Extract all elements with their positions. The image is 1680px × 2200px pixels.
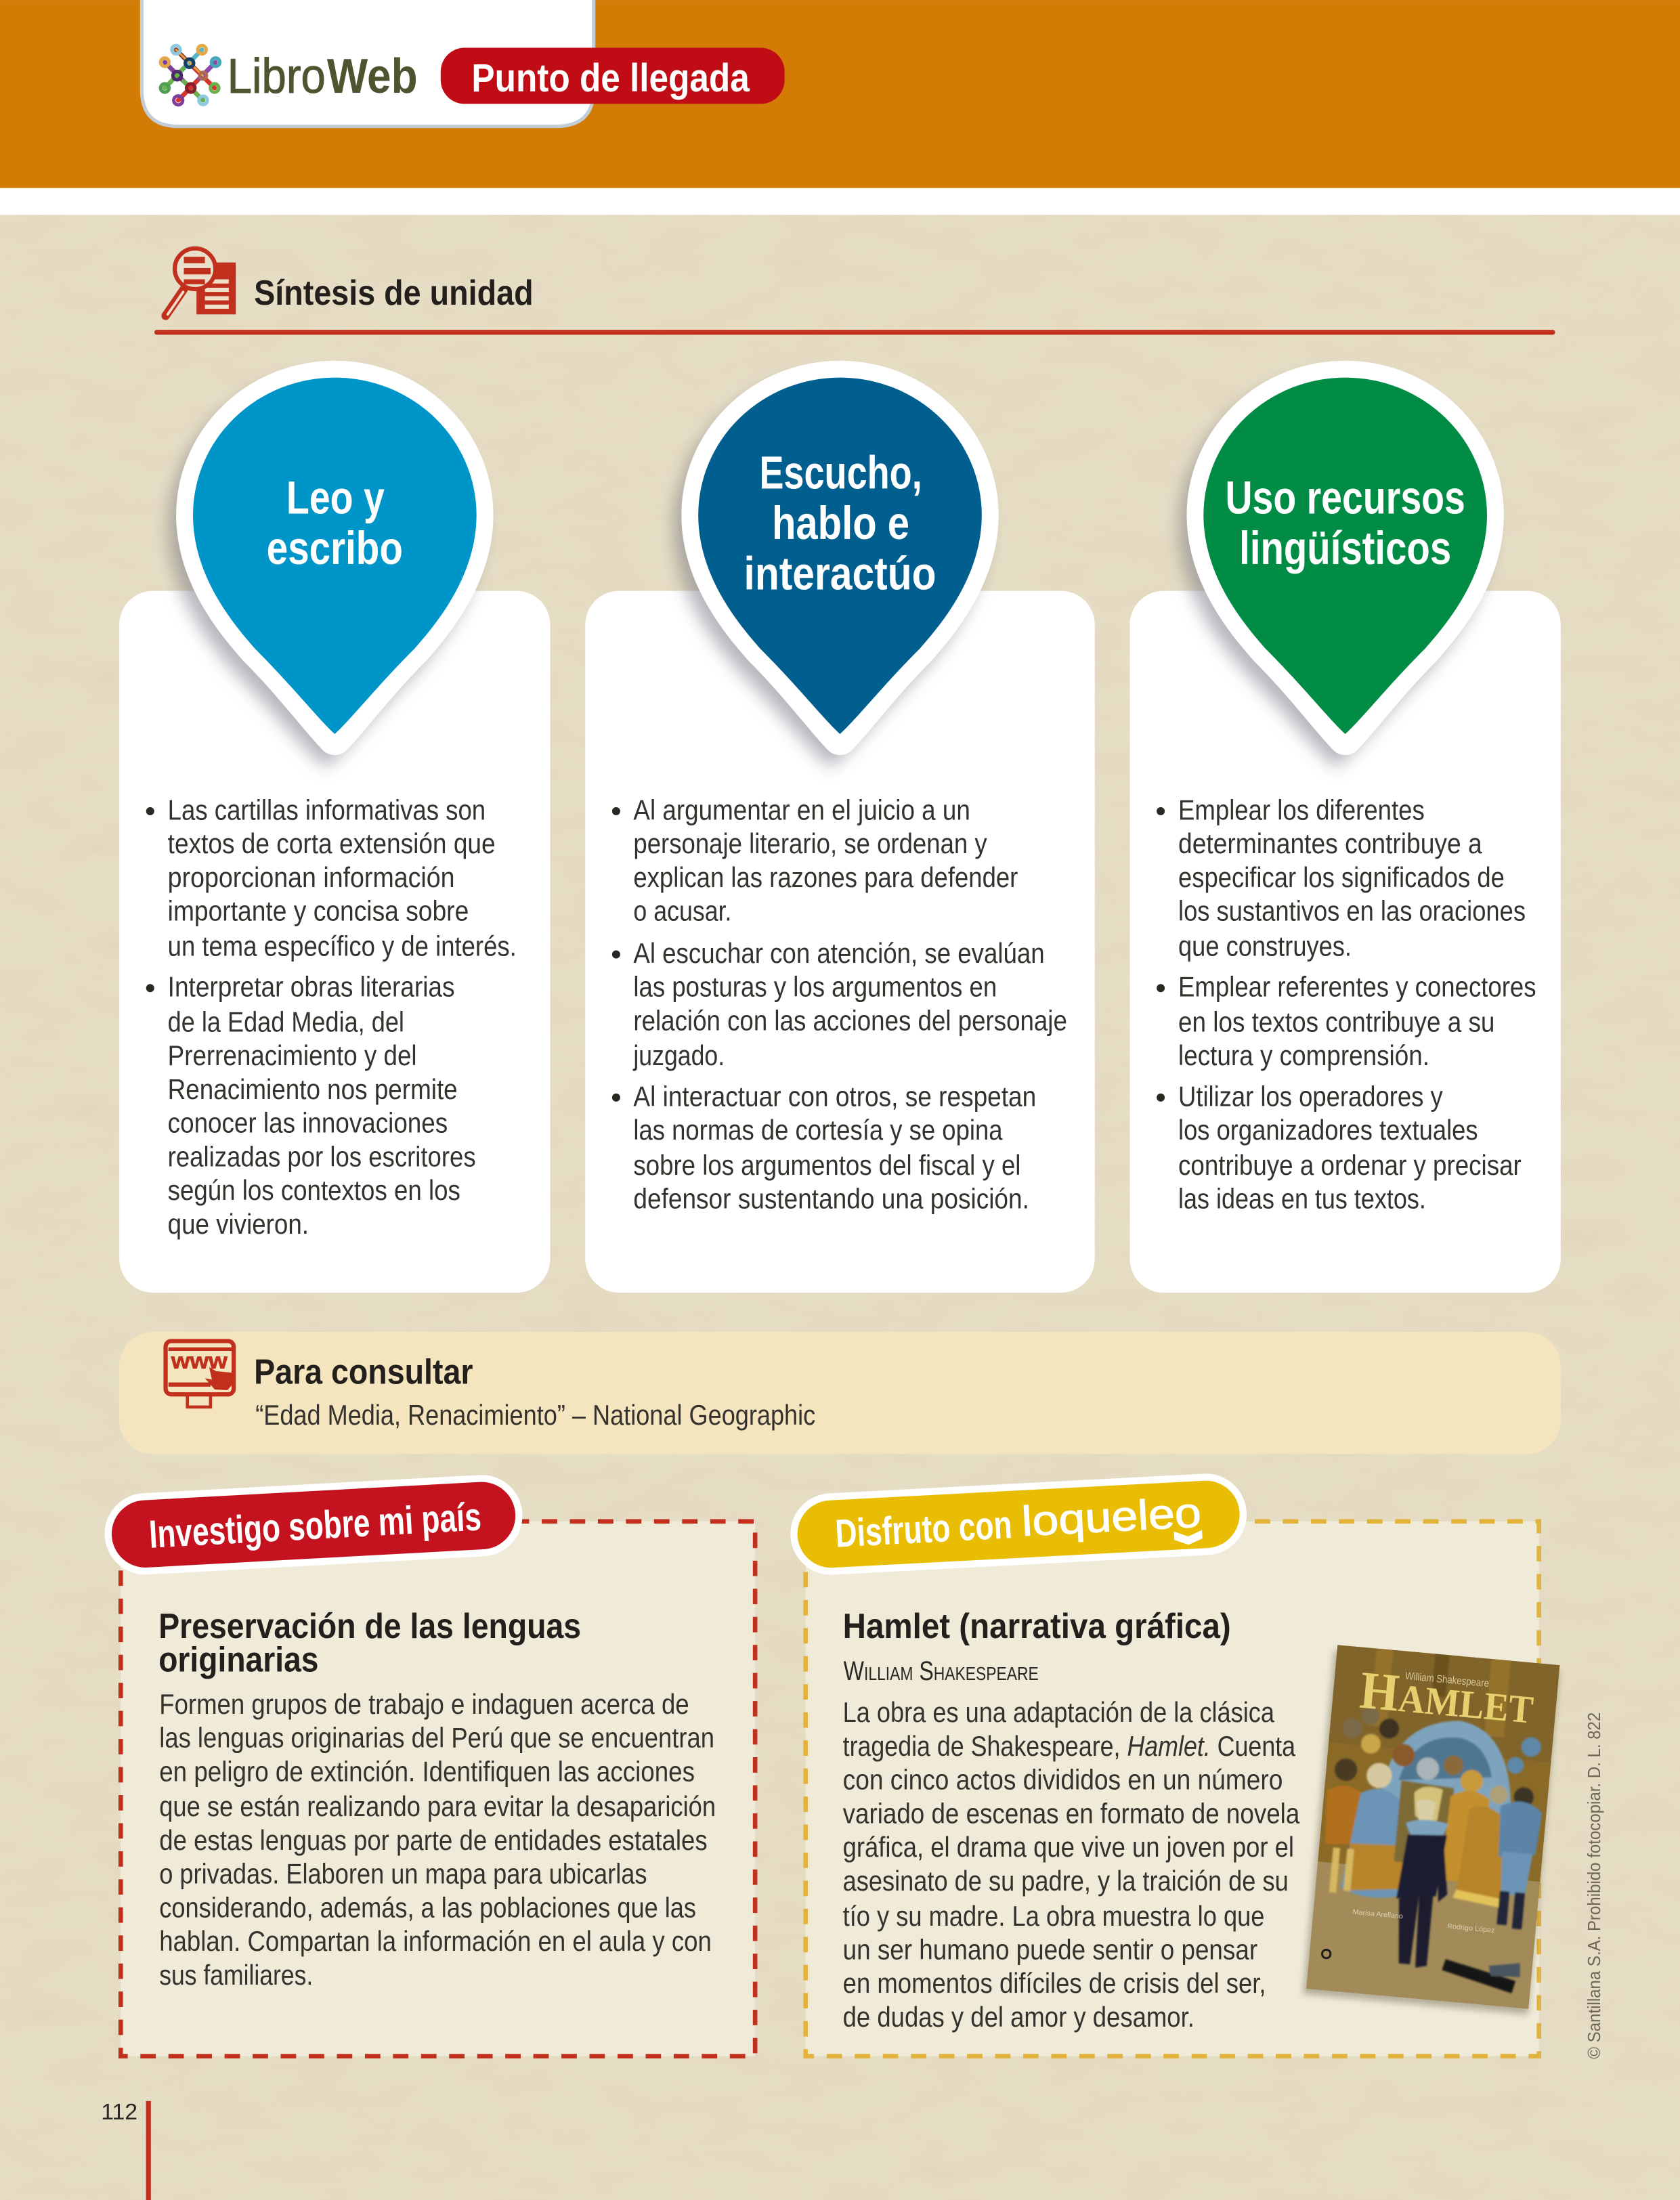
text block: bullets: de la Edad Media, del xyxy=(168,1006,404,1037)
text: author: William Shakespeare xyxy=(844,1656,1039,1686)
text block: synopsis: variado de escenas en formato de novela xyxy=(843,1797,1300,1829)
text block: bullets: contribuye a ordenar y precisar xyxy=(1178,1149,1522,1181)
text block: synopsis: asesinato de su padre, y la traición de su xyxy=(843,1865,1289,1897)
book cover: Hamlet xyxy=(1303,1645,1559,2014)
pin: Uso recursos lingüísticos: lingüísticos xyxy=(1239,523,1451,574)
section header: Síntesis de unidad xyxy=(166,249,534,316)
tab label xyxy=(110,1480,517,1570)
text block: bullets: las posturas y los argumentos en xyxy=(633,971,997,1003)
heading xyxy=(158,1606,581,1679)
page number: 112 xyxy=(101,2100,137,2125)
text block: bullets: las ideas en tus textos. xyxy=(1178,1183,1426,1215)
text block: activity: hablan. Compartan la información en el aula y con xyxy=(159,1925,712,1957)
pin: Escucho, hablo e interactúo: hablo e xyxy=(772,498,909,549)
text block: activity: Formen grupos de trabajo e indaguen acerca de xyxy=(159,1688,689,1720)
text block: bullets: o acusar. xyxy=(633,895,731,927)
panel: Disfruto con loqueleo xyxy=(796,1479,1539,2056)
book cover: Hamlet: Marisa Arellano xyxy=(1352,1909,1404,1920)
tab label: loqueleo xyxy=(1020,1490,1203,1545)
pin: Leo y escribo: escribo xyxy=(267,523,403,574)
text block: activity: que se están realizando para evitar la desaparición xyxy=(159,1790,716,1822)
card xyxy=(1130,591,1561,1293)
copyright note: © Santillana S.A. Prohibido fotocopiar. D. L. 822 xyxy=(1585,1712,1604,2059)
text block: synopsis: un ser humano puede sentir o pensar xyxy=(843,1933,1257,1965)
text block: bullets: conocer las innovaciones xyxy=(168,1107,448,1139)
text block: activity: considerando, además, a las poblaciones que las xyxy=(159,1891,696,1923)
text: source: “Edad Media, Renacimiento” – National Geographic xyxy=(255,1399,815,1431)
text block: bullets: Emplear referentes y conectores xyxy=(1178,971,1536,1003)
text block: activity: en peligro de extinción. Identifiquen las acciones xyxy=(159,1755,695,1787)
logo tab xyxy=(142,0,594,127)
text block: bullets: que construyes. xyxy=(1178,930,1352,962)
logo: LibroWeb xyxy=(160,45,418,105)
pin: Leo y escribo xyxy=(184,378,477,747)
text block: bullets: Las cartillas informativas son xyxy=(168,794,486,825)
book cover: Hamlet: Rodrigo López xyxy=(1447,1923,1495,1935)
text block: bullets: relación con las acciones del personaje xyxy=(633,1004,1067,1036)
text block: bullets: textos de corta extensión que xyxy=(168,827,496,859)
heading: Para consultar xyxy=(254,1352,473,1392)
panel: Escucho, hablo e interactúo xyxy=(585,591,1095,1293)
icon: www monitor: www xyxy=(171,1349,228,1374)
text block: bullets: explican las razones para defender xyxy=(633,861,1018,893)
text block: bullets: un tema específico y de interés. xyxy=(168,930,517,962)
text block: synopsis: tragedia de Shakespeare, Hamlet. Cuenta xyxy=(843,1730,1296,1762)
tab label: Disfruto con xyxy=(834,1503,1013,1556)
text block: bullets: lectura y comprensión. xyxy=(1178,1039,1429,1071)
text block: synopsis: de dudas y del amor y desamor. xyxy=(843,2001,1194,2033)
book cover: Hamlet: HAMLET xyxy=(1358,1661,1536,1735)
text block: bullets: en los textos contribuye a su xyxy=(1178,1006,1494,1037)
pin: Escucho, hablo e interactúo: Escucho, xyxy=(759,447,922,498)
text block: synopsis: La obra es una adaptación de la clásica xyxy=(843,1696,1275,1728)
text block: bullets xyxy=(612,794,1067,1215)
pin: Uso recursos lingüísticos: Uso recursos xyxy=(1225,473,1465,524)
heading: originarias xyxy=(158,1640,318,1679)
panel: Leo y escribo xyxy=(119,591,550,1293)
tab label: Investigo sobre mi país xyxy=(148,1494,482,1557)
dashed box xyxy=(121,1522,755,2056)
text block: bullets: Interpretar obras literarias xyxy=(168,971,455,1003)
wordmark: Libro xyxy=(228,49,326,104)
text block: bullets: Utilizar los operadores y xyxy=(1178,1080,1443,1112)
text block: bullets: personaje literario, se ordenan y xyxy=(633,827,987,859)
text block: bullets xyxy=(1157,794,1536,1215)
text block: bullets: especificar los significados de xyxy=(1178,861,1505,893)
text block: bullets: determinantes contribuye a xyxy=(1178,827,1483,859)
text block: bullets: que vivieron. xyxy=(168,1208,309,1240)
icon: magnifier and document xyxy=(166,249,236,316)
icon: woven star xyxy=(160,45,220,105)
book cover: Hamlet: William Shakespeare xyxy=(1404,1670,1490,1689)
icon: www monitor xyxy=(166,1341,234,1407)
text block: bullets: Al interactuar con otros, se respetan xyxy=(633,1080,1036,1112)
panel: Para consultar xyxy=(119,1332,1561,1454)
text block: bullets: Al escuchar con atención, se evalúan xyxy=(633,937,1045,969)
red divider xyxy=(154,330,1555,335)
text block: synopsis: en momentos difíciles de crisis del ser, xyxy=(843,1967,1266,1999)
heading: Hamlet (narrativa gráfica) xyxy=(843,1606,1231,1645)
panel: Investigo sobre mi país xyxy=(110,1480,755,2056)
footer rule xyxy=(146,2101,151,2200)
text block: bullets: los organizadores textuales xyxy=(1178,1114,1478,1146)
text block: synopsis: tío y su madre. La obra muestra lo que xyxy=(843,1900,1264,1932)
pin: Escucho, hablo e interactúo xyxy=(689,378,982,747)
text block: bullets: Renacimiento nos permite xyxy=(168,1073,458,1105)
text block: synopsis: gráfica, el drama que vive un joven por el xyxy=(843,1831,1294,1863)
text block: activity xyxy=(159,1688,716,1991)
card xyxy=(585,591,1095,1293)
pin: Uso recursos lingüísticos xyxy=(1194,378,1487,747)
pin: Escucho, hablo e interactúo: interactúo xyxy=(744,548,936,600)
text block: bullets: Emplear los diferentes xyxy=(1178,794,1425,825)
heading: Preservación de las lenguas xyxy=(158,1606,581,1645)
heading: Síntesis de unidad xyxy=(254,273,534,312)
text block: bullets: sobre los argumentos del fiscal y el xyxy=(633,1149,1020,1181)
text block: bullets: según los contextos en los xyxy=(168,1174,460,1206)
text block: activity: sus familiares. xyxy=(159,1959,313,1991)
text block: bullets: proporcionan información xyxy=(168,861,455,893)
text block: activity: de estas lenguas por parte de entidades estatales xyxy=(159,1824,708,1856)
text block: bullets: realizadas por los escritores xyxy=(168,1140,476,1172)
text block: bullets xyxy=(146,794,517,1240)
text block: bullets: las normas de cortesía y se opina xyxy=(633,1114,1003,1146)
panel: Uso recursos lingüísticos xyxy=(1130,591,1561,1293)
text block: bullets: Prerrenacimiento y del xyxy=(168,1039,417,1071)
badge: Punto de llegada: Punto de llegada xyxy=(471,56,750,100)
dashed box xyxy=(806,1522,1539,2056)
text block: bullets: juzgado. xyxy=(632,1039,725,1071)
card xyxy=(119,591,550,1293)
text block: bullets: los sustantivos en las oraciones xyxy=(1178,895,1526,927)
text block: bullets: defensor sustentando una posición. xyxy=(633,1183,1029,1215)
wordmark: Web xyxy=(327,49,418,104)
tab label xyxy=(796,1479,1241,1570)
text block: bullets: importante y concisa sobre xyxy=(168,895,469,927)
text block: activity: o privadas. Elaboren un mapa para ubicarlas xyxy=(159,1858,647,1890)
text block: bullets: Al argumentar en el juicio a un xyxy=(633,794,970,825)
text block: synopsis xyxy=(843,1696,1300,2033)
text block: synopsis: con cinco actos divididos en un número xyxy=(843,1764,1283,1796)
pin: Leo y escribo: Leo y xyxy=(286,473,385,524)
header band xyxy=(0,0,1680,215)
text block: activity: las lenguas originarias del Perú que se encuentran xyxy=(159,1722,714,1754)
